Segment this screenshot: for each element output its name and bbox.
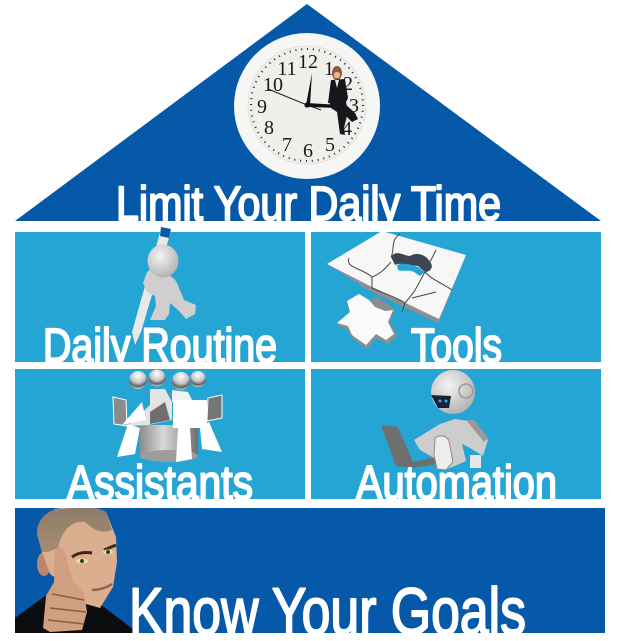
icon: clock with seated woman: 6: [303, 140, 313, 162]
label: Tools: Tools: [411, 320, 502, 373]
woman in suit: [328, 66, 358, 135]
icon: robot with laptop: [381, 370, 488, 470]
label: Assistants: Assistants: [67, 457, 253, 510]
label: Daily Routine: Daily Routine: [43, 320, 277, 373]
icon: clock with seated woman: 12: [298, 51, 318, 73]
icon: clock with seated woman: 8: [264, 117, 274, 139]
panel: roof: [15, 4, 601, 231]
label: Automation: Automation: [356, 457, 557, 510]
icon: clock with seated woman: 7: [282, 134, 292, 156]
panel: Automation: [311, 369, 601, 510]
clock hands: [268, 73, 340, 110]
panel: Know Your Goals: [15, 507, 605, 641]
icon: team of figures at table: [113, 370, 222, 462]
icon: clock with seated woman: 5: [325, 134, 335, 156]
icon: clock with seated woman: 10: [263, 74, 283, 96]
icon: clock with seated woman: 2: [343, 73, 353, 95]
icon: man pointing thumbs up: [15, 507, 138, 633]
panel: Assistants: [15, 369, 305, 510]
heading: Limit Your Daily Time: Limit Your Daily Time: [116, 178, 501, 231]
icon: jigsaw puzzle: [327, 231, 466, 322]
icon: figure holding pen: [132, 227, 196, 345]
icon: clock with seated woman: 4: [342, 118, 352, 140]
icon: clock with seated woman: [234, 33, 380, 179]
panel: Tools: [311, 231, 601, 373]
icon: clock with seated woman: 1: [324, 58, 334, 80]
icon: loose puzzle piece: [337, 294, 397, 349]
icon: clock with seated woman: 3: [349, 95, 359, 117]
icon: clock with seated woman: 9: [257, 96, 267, 118]
icon: clock with seated woman: 11: [277, 58, 297, 80]
panel: Daily Routine: [15, 227, 305, 373]
